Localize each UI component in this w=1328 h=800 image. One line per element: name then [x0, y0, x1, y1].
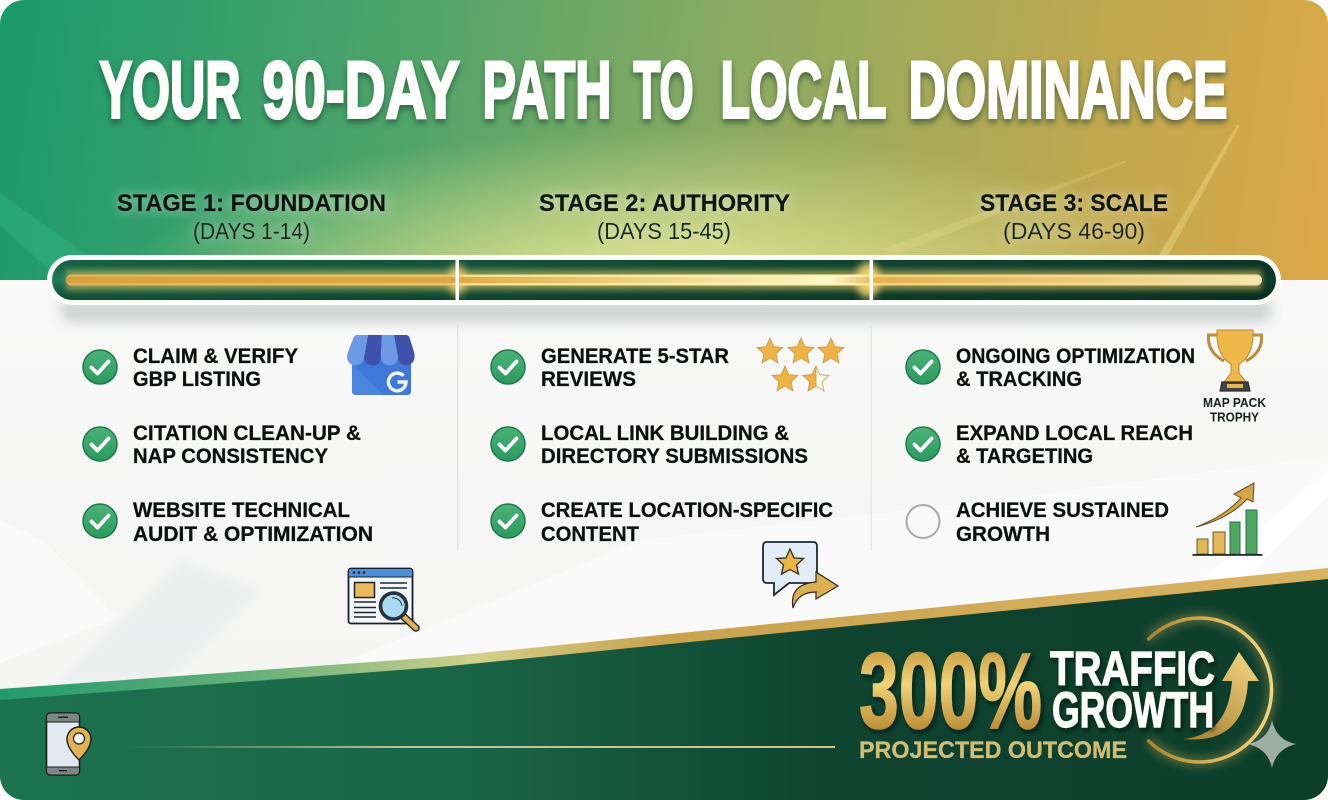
column dividers [457, 325, 872, 550]
item text: claim and verify [134, 348, 298, 386]
icon: growth bar chart [1192, 483, 1262, 556]
check: location content [491, 504, 525, 538]
title: 90-DAY [262, 46, 460, 136]
item text: five-star reviews: GENERATE 5-STAR [541, 345, 729, 368]
item text: website audit: AUDIT & OPTIMIZATION [133, 523, 373, 546]
item text: expand local reach: EXPAND LOCAL REACH [956, 422, 1193, 445]
stage 1 heading: (DAYS 1-14) [193, 218, 310, 244]
icon: website audit magnifier [348, 568, 416, 628]
check: ongoing optimization [906, 350, 940, 384]
icon: trophy with label: MAP PACK [1203, 395, 1267, 410]
item text: expand local reach [956, 425, 1192, 464]
icon: sparkle [1248, 720, 1296, 768]
stage 1 heading: STAGE 1: FOUNDATION [117, 190, 386, 217]
icon: review stars [757, 338, 844, 391]
item text: citation clean-up [134, 425, 360, 464]
background: lower light panel [0, 389, 1328, 689]
check: five-star reviews [491, 350, 525, 384]
stage 3 heading: (DAYS 46-90) [1003, 218, 1145, 244]
stat label traffic growth: GROWTH [1052, 682, 1214, 738]
title: LOCAL [720, 46, 886, 136]
item text: expand local reach: & TARGETING [956, 445, 1093, 468]
icon: trophy with label: TROPHY [1210, 410, 1259, 424]
item text: sustained growth: ACHIEVE SUSTAINED [956, 499, 1169, 522]
stage 3 heading [980, 190, 1168, 244]
check: citation clean-up [83, 427, 117, 461]
big stat 300 percent: 300% [859, 630, 1042, 751]
background: top green to gold gradient [0, 0, 1328, 280]
stage 2 heading: STAGE 2: AUTHORITY [539, 190, 790, 217]
column 3 checklist [906, 345, 1195, 546]
item text: location content: CREATE LOCATION-SPECIFIC [541, 499, 833, 522]
projected outcome caption: PROJECTED OUTCOME [859, 737, 1127, 764]
title: PATH [482, 46, 612, 136]
growth ring with arrow [1149, 618, 1272, 762]
stage 1 heading [117, 190, 386, 244]
item text: five-star reviews [542, 348, 729, 386]
item text: local link building [542, 425, 808, 464]
item text: local link building: DIRECTORY SUBMISSIONS [541, 445, 808, 468]
footer accent line [125, 746, 835, 748]
item text: citation clean-up: NAP CONSISTENCY [133, 445, 328, 468]
icon: phone with location pin [46, 713, 91, 775]
item text: website audit [132, 502, 372, 542]
item text: five-star reviews: REVIEWS [541, 368, 636, 391]
icon: speech bubble with star and share arrow [763, 542, 838, 608]
item text: ongoing optimization: ONGOING OPTIMIZATION [956, 345, 1195, 368]
item text: website audit: WEBSITE TECHNICAL [133, 499, 350, 522]
item text: ongoing optimization [956, 348, 1194, 386]
title [98, 60, 1230, 128]
stage 2 heading: (DAYS 15-45) [597, 218, 731, 244]
check: expand local reach [906, 427, 940, 461]
item text: sustained growth [956, 502, 1168, 542]
item text: sustained growth: GROWTH [956, 523, 1050, 546]
icon: trophy with label [1203, 330, 1267, 424]
empty circle: sustained growth [906, 505, 940, 538]
item text: location content [542, 502, 833, 542]
title: TO [634, 46, 694, 136]
bottom band: stripe and dark green panel [0, 568, 1328, 800]
stage 3 heading: STAGE 3: SCALE [980, 190, 1168, 217]
check: local link building [491, 427, 525, 461]
timeline progress bar [47, 255, 1281, 322]
stat label traffic growth: TRAFFIC [1050, 643, 1215, 696]
check: claim and verify [83, 350, 117, 384]
item text: local link building: LOCAL LINK BUILDING & [541, 422, 789, 445]
stat label traffic growth [1050, 643, 1215, 738]
item text: location content: CONTENT [541, 523, 639, 546]
column 2 checklist [491, 345, 833, 546]
check: website audit [83, 504, 117, 538]
stage 2 heading [539, 190, 790, 244]
item text: claim and verify: CLAIM & VERIFY [133, 345, 298, 368]
item text: ongoing optimization: & TRACKING [956, 368, 1082, 391]
column 1 checklist [83, 345, 373, 546]
title: YOUR [100, 46, 240, 136]
item text: citation clean-up: CITATION CLEAN-UP & [133, 422, 361, 445]
item text: claim and verify: GBP LISTING [133, 368, 261, 391]
icon: google business storefront [347, 335, 414, 395]
